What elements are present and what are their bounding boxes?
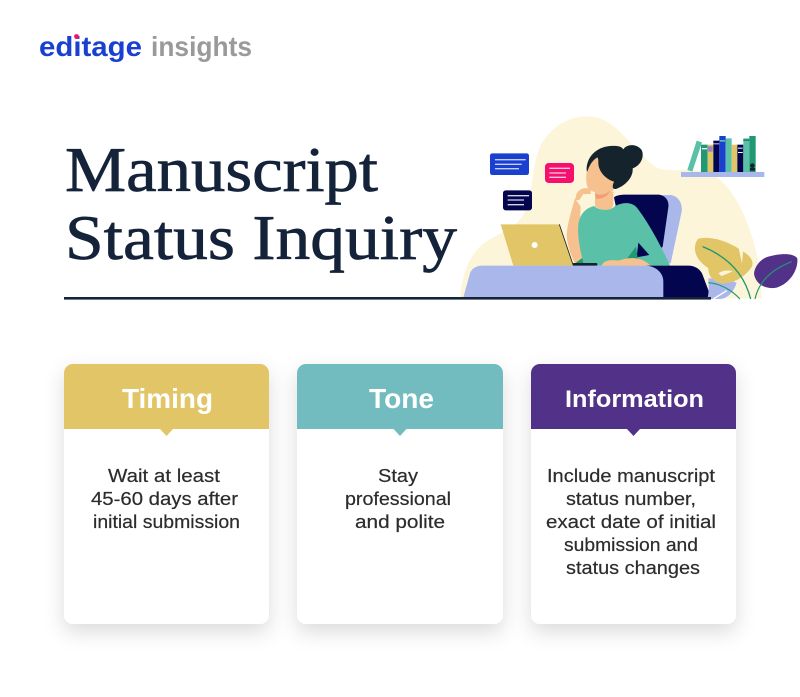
title rule [64, 297, 711, 300]
chair [614, 195, 682, 263]
information text: Include manuscript [547, 465, 715, 486]
timing text [91, 465, 240, 532]
information text: submission and [564, 534, 698, 555]
timing header: Timing [122, 383, 213, 414]
panel: tone [297, 364, 503, 624]
woman [567, 145, 670, 266]
panel: information [531, 364, 736, 624]
information text: exact date of initial [546, 511, 716, 532]
information header: Information [565, 386, 704, 413]
chat bubbles [490, 153, 574, 210]
timing header [64, 364, 269, 436]
illustration: woman at laptop [460, 116, 797, 299]
information text: status number, [566, 488, 696, 509]
timing text: 45-60 days after [91, 488, 238, 509]
timing text: initial submission [93, 511, 240, 532]
title [65, 134, 457, 273]
tone text: professional [345, 488, 451, 509]
title: Manuscript [65, 134, 378, 205]
panel: timing [64, 364, 269, 624]
tone text [345, 465, 451, 532]
information text: status changes [566, 557, 700, 578]
tone text: Stay [378, 465, 419, 486]
bookshelf [681, 136, 764, 177]
logo: editage insights [39, 31, 252, 62]
desk [463, 266, 712, 299]
laptop [501, 224, 597, 266]
timing text: Wait at least [108, 465, 220, 486]
tone header: Tone [369, 383, 434, 414]
logo: editage insights: editage [39, 31, 142, 62]
information header [531, 364, 736, 436]
tone text: and polite [355, 511, 445, 532]
information text [546, 465, 716, 578]
logo: editage insights: insights [151, 31, 252, 62]
background blob [460, 116, 762, 298]
tone header [297, 364, 503, 436]
plant [695, 238, 797, 299]
title: Status Inquiry [65, 202, 457, 273]
